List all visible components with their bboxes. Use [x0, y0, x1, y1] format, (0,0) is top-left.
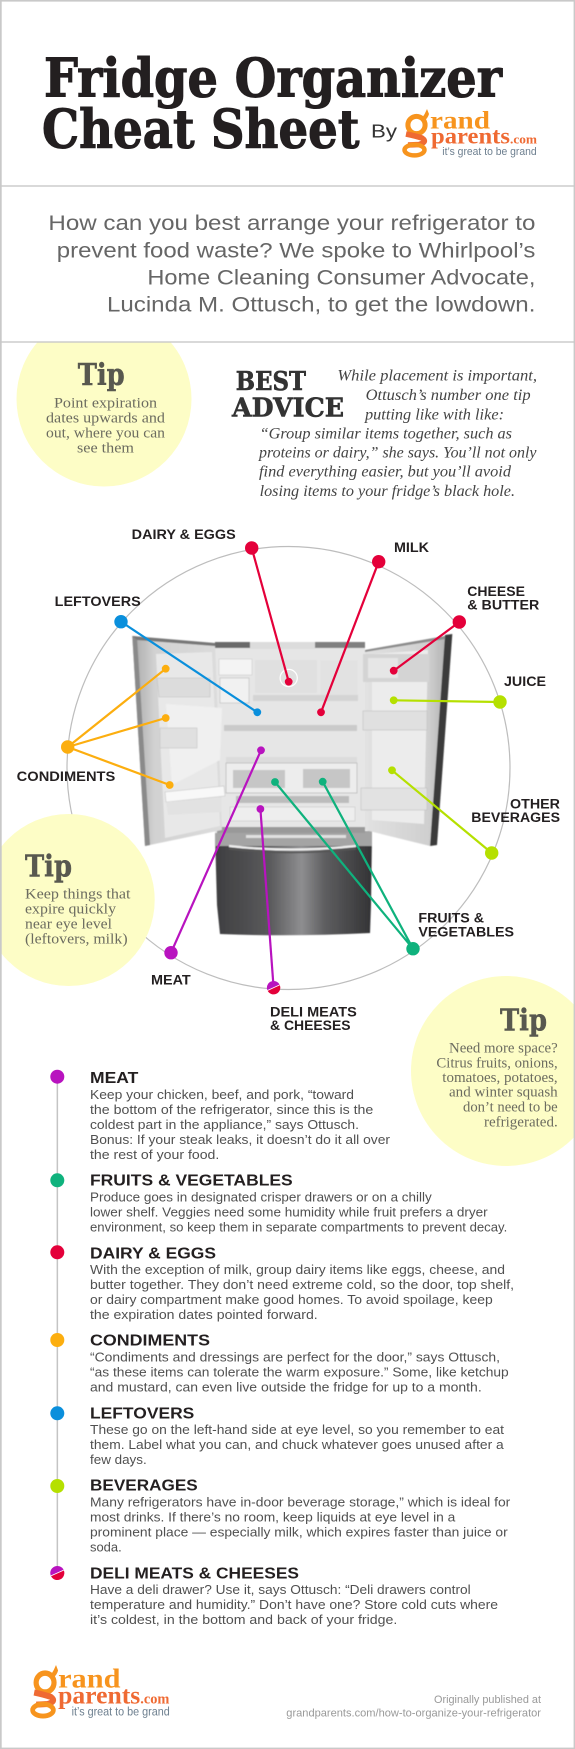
list item: deli meats and cheeses: Have a deli drawer? Use it, says Ottusch: “Deli drawers control [90, 1582, 471, 1597]
tip: eye level circle [0, 814, 155, 986]
intro text: How can you best arrange your refrigerator to [48, 212, 535, 235]
best advice heading: BEST [236, 367, 307, 397]
tip: expiration dates circle: out, where you can [46, 426, 166, 442]
best advice heading [231, 367, 344, 424]
callout: fruits and vegetables [271, 778, 420, 955]
fridge illustration [132, 634, 452, 935]
diagram labels: DAIRY & EGGS [132, 527, 236, 542]
tip: eye level circle: (leftovers, milk) [25, 931, 128, 947]
source credit: Originally published at [434, 1694, 541, 1706]
best advice text: “Group similar items together, such as [260, 425, 512, 442]
diagram labels: MILK [394, 540, 429, 555]
list item: deli meats and cheeses: DELI MEATS & CHEESES [90, 1565, 299, 1582]
diagram labels [17, 527, 560, 1033]
logo: grandparents header: .com [510, 131, 537, 146]
list item: condiments: CONDIMENTS [90, 1333, 210, 1350]
intro text [48, 212, 535, 317]
diagram labels: & BUTTER [467, 597, 540, 612]
logo: grandparents header: parents [431, 123, 510, 148]
intro text: Home Cleaning Consumer Advocate, [147, 266, 535, 289]
list item: fruits and vegetables: Produce goes in designated crisper drawers or on a chilly [90, 1190, 432, 1205]
best advice text: losing items to your fridge’s black hole. [260, 483, 515, 500]
list item: dairy and eggs: DAIRY & EGGS [90, 1245, 216, 1262]
callout: leftovers [114, 615, 261, 716]
diagram labels: CHEESE [467, 584, 525, 599]
diagram labels: JUICE [504, 674, 546, 689]
list item: dairy and eggs: With the exception of milk, group dairy items like eggs, cheese, and [90, 1262, 505, 1277]
list item: deli meats and cheeses: it’s coldest, in the bottom and back of your fridge. [90, 1612, 397, 1627]
list item: meat: Bonus: If your steak leaks, it doesn’t do it all over [90, 1132, 391, 1147]
list item: deli meats and cheeses: temperature and humidity.” Don’t have one? Store cold cuts where [90, 1597, 498, 1612]
list item: leftovers: few days. [90, 1452, 147, 1467]
callout: other beverages [388, 766, 498, 860]
callout: meat [164, 746, 265, 959]
diagram labels: BEVERAGES [471, 810, 560, 825]
diagram labels: DELI MEATS [270, 1004, 357, 1019]
tip: more space circle: Need more space? [449, 1041, 558, 1057]
best advice text [258, 368, 537, 500]
title [42, 48, 503, 161]
guide circle [67, 546, 510, 990]
tip: more space circle: and winter squash [449, 1085, 558, 1101]
title: Cheat Sheet [42, 99, 360, 161]
tip: more space circle: Tip [500, 1004, 547, 1039]
logo: grandparents footer: it’s great to be grand [72, 1705, 170, 1719]
list item: beverages [90, 1478, 511, 1554]
best advice text: Ottusch’s number one tip [366, 387, 531, 404]
tip: expiration dates circle: see them [77, 441, 134, 457]
tip: eye level circle: Keep things that [25, 886, 131, 902]
tip: eye level circle: expire quickly [25, 901, 117, 917]
best advice text: find everything easier, but you’ll avoid [259, 464, 512, 481]
diagram labels: & CHEESES [270, 1018, 351, 1033]
callout: milk [317, 555, 385, 716]
tip: more space circle [411, 976, 575, 1166]
logo: grandparents footer: rand [58, 1663, 121, 1694]
logo: grandparents footer: parents [58, 1682, 140, 1709]
tip: expiration dates circle: dates upwards and [46, 411, 166, 427]
best advice text: While placement is important, [337, 368, 537, 385]
list item: condiments: and mustard, can even live outside the fridge for up to a month. [90, 1380, 482, 1395]
tip: more space circle: don’t need to be [463, 1100, 558, 1116]
tip: expiration dates circle [16, 342, 192, 486]
tip: eye level circle: near eye level [25, 916, 112, 932]
left door [132, 636, 225, 846]
list item: leftovers: LEFTOVERS [90, 1405, 195, 1422]
list item: leftovers: them. Label what you can, and chuck whatever goes unused after a [90, 1437, 505, 1452]
title: Fridge Organizer [44, 48, 503, 110]
byline: By [371, 121, 397, 141]
list item: beverages: Many refrigerators have in-door beverage storage,” which is ideal for [90, 1494, 511, 1509]
list item: meat: the rest of your food. [90, 1147, 219, 1162]
list item: beverages: prominent place — especially milk, which expires faster than juice or [90, 1524, 508, 1539]
list item: fruits and vegetables: lower shelf. Veggies need some humidity while fruit prefers a dryer [90, 1205, 488, 1220]
best advice text: putting like with like: [364, 406, 504, 423]
list item: dairy and eggs: the expiration dates pointed forward. [90, 1307, 318, 1322]
best advice text: proteins or dairy,” she says. You’ll not only [258, 445, 537, 462]
callout: deli meats and cheeses [256, 805, 280, 994]
tip: eye level circle: Tip [25, 850, 72, 885]
fridge interior [215, 642, 365, 833]
list timeline [50, 1070, 64, 1580]
list item: deli meats and cheeses [90, 1565, 498, 1627]
logo: grandparents header: rand [430, 107, 490, 134]
logo: grandparents footer [33, 1663, 170, 1719]
logo: grandparents header: it’s great to be grand [442, 146, 537, 158]
list item: condiments: “Condiments and dressings are perfect for the door,” says Ottusch, [90, 1350, 500, 1365]
list item: fruits and vegetables: environment, so keep them in separate compartments to prevent decay. [90, 1220, 507, 1235]
diagram labels: CONDIMENTS [17, 769, 115, 784]
diagram labels: VEGETABLES [418, 924, 514, 939]
list item: condiments: “as these items can tolerate the warm exposure.” Some, like ketchup [90, 1365, 509, 1380]
list item: dairy and eggs: or dairy compartment make good homes. To avoid spoilage, keep [90, 1292, 493, 1307]
source credit [286, 1694, 541, 1720]
tip: more space circle: refrigerated. [484, 1115, 558, 1131]
list item: meat: the bottom of the refrigerator, since this is the [90, 1102, 373, 1117]
diagram labels: MEAT [151, 972, 191, 987]
list item: meat: coldest part in the appliance,” says Ottusch. [90, 1117, 359, 1132]
callout: condiments [61, 665, 174, 789]
list item: leftovers [90, 1405, 505, 1467]
best advice heading: ADVICE [231, 394, 344, 424]
intro text: Lucinda M. Ottusch, to get the lowdown. [107, 294, 535, 317]
diagram labels: OTHER [510, 797, 560, 812]
list item: meat: Keep your chicken, beef, and pork, “toward [90, 1087, 354, 1102]
list item: fruits and vegetables: FRUITS & VEGETABLES [90, 1173, 293, 1190]
list item: fruits and vegetables [90, 1173, 507, 1235]
list item: condiments [90, 1333, 509, 1395]
tip: more space circle: Citrus fruits, onions, [436, 1055, 558, 1071]
list item: meat: MEAT [90, 1070, 139, 1087]
list item: leftovers: These go on the left-hand side at eye level, so you remember to eat [90, 1422, 504, 1437]
callout: juice [390, 695, 507, 709]
diagram labels: LEFTOVERS [55, 594, 141, 609]
list item: meat [90, 1070, 391, 1162]
logo: grandparents header [404, 107, 537, 158]
callout: cheese and butter [390, 615, 466, 675]
list item: dairy and eggs [90, 1245, 514, 1322]
tip: expiration dates circle: Point expiration [54, 396, 158, 412]
right door [361, 634, 452, 846]
logo: grandparents footer: .com [140, 1692, 170, 1707]
list item: beverages: most drinks. If there’s no room, keep liquids at eye level in a [90, 1509, 456, 1524]
intro text: prevent food waste? We spoke to Whirlpool’s [57, 239, 535, 262]
callout lines and dots: dairy and eggs [245, 541, 297, 687]
freezer drawer [215, 831, 372, 935]
list item: beverages: BEVERAGES [90, 1478, 198, 1495]
list item: dairy and eggs: butter together. They don’t need extreme cold, so the door, top shelf, [90, 1277, 514, 1292]
list item: beverages: soda. [90, 1539, 122, 1554]
tip: expiration dates circle: Tip [78, 358, 125, 393]
source credit: grandparents.com/how-to-organize-your-refrigerator [286, 1708, 541, 1720]
diagram labels: FRUITS & [418, 911, 484, 926]
tip: more space circle: tomatoes, potatoes, [442, 1070, 558, 1086]
